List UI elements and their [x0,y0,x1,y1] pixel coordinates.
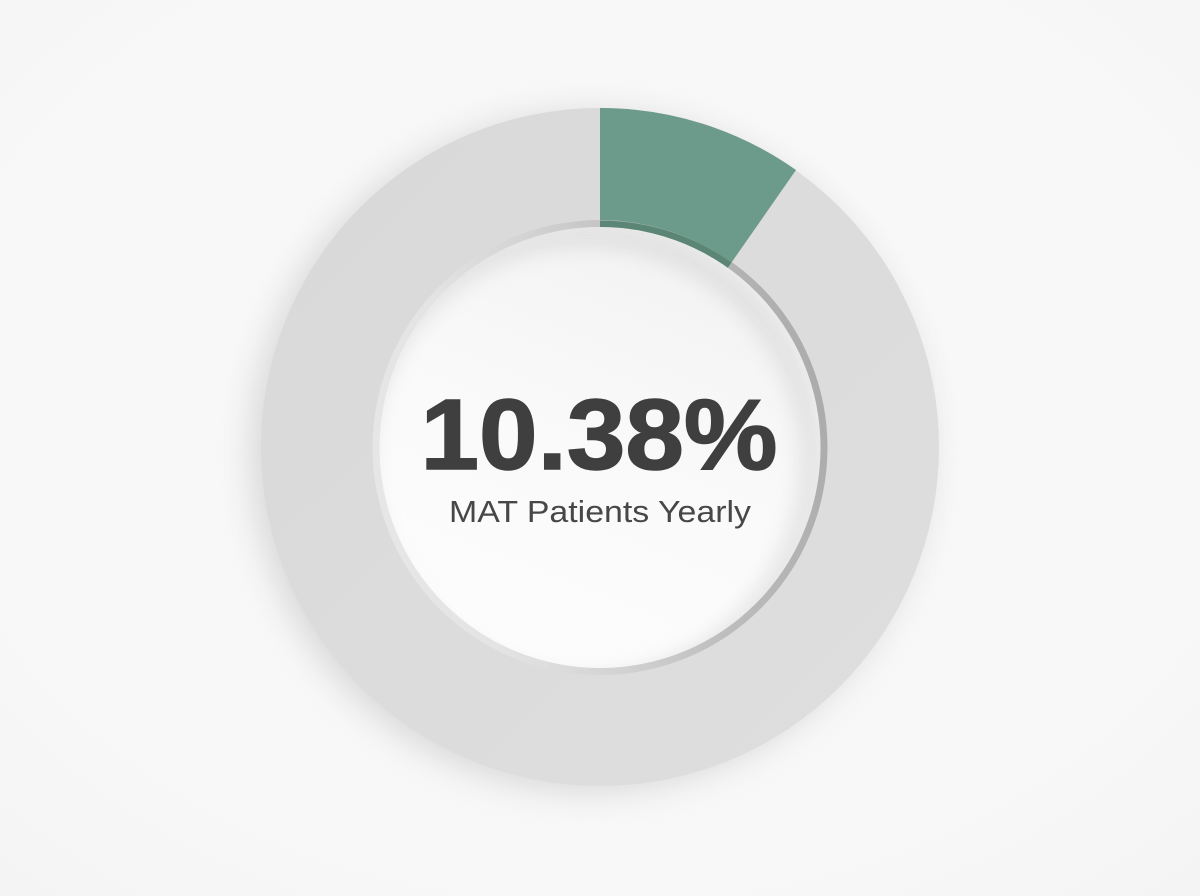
subtitle: MAT Patients Yearly [449,494,752,529]
ring shadow [252,114,928,790]
ring: remaining share [261,108,939,786]
donut chart [261,108,939,786]
center hole [360,227,820,687]
headline value: 10.38% [420,379,778,491]
wedge: 10.38% share [600,108,796,265]
inner ledge [372,220,828,675]
infographic: donut chart with percentage [242,104,939,800]
